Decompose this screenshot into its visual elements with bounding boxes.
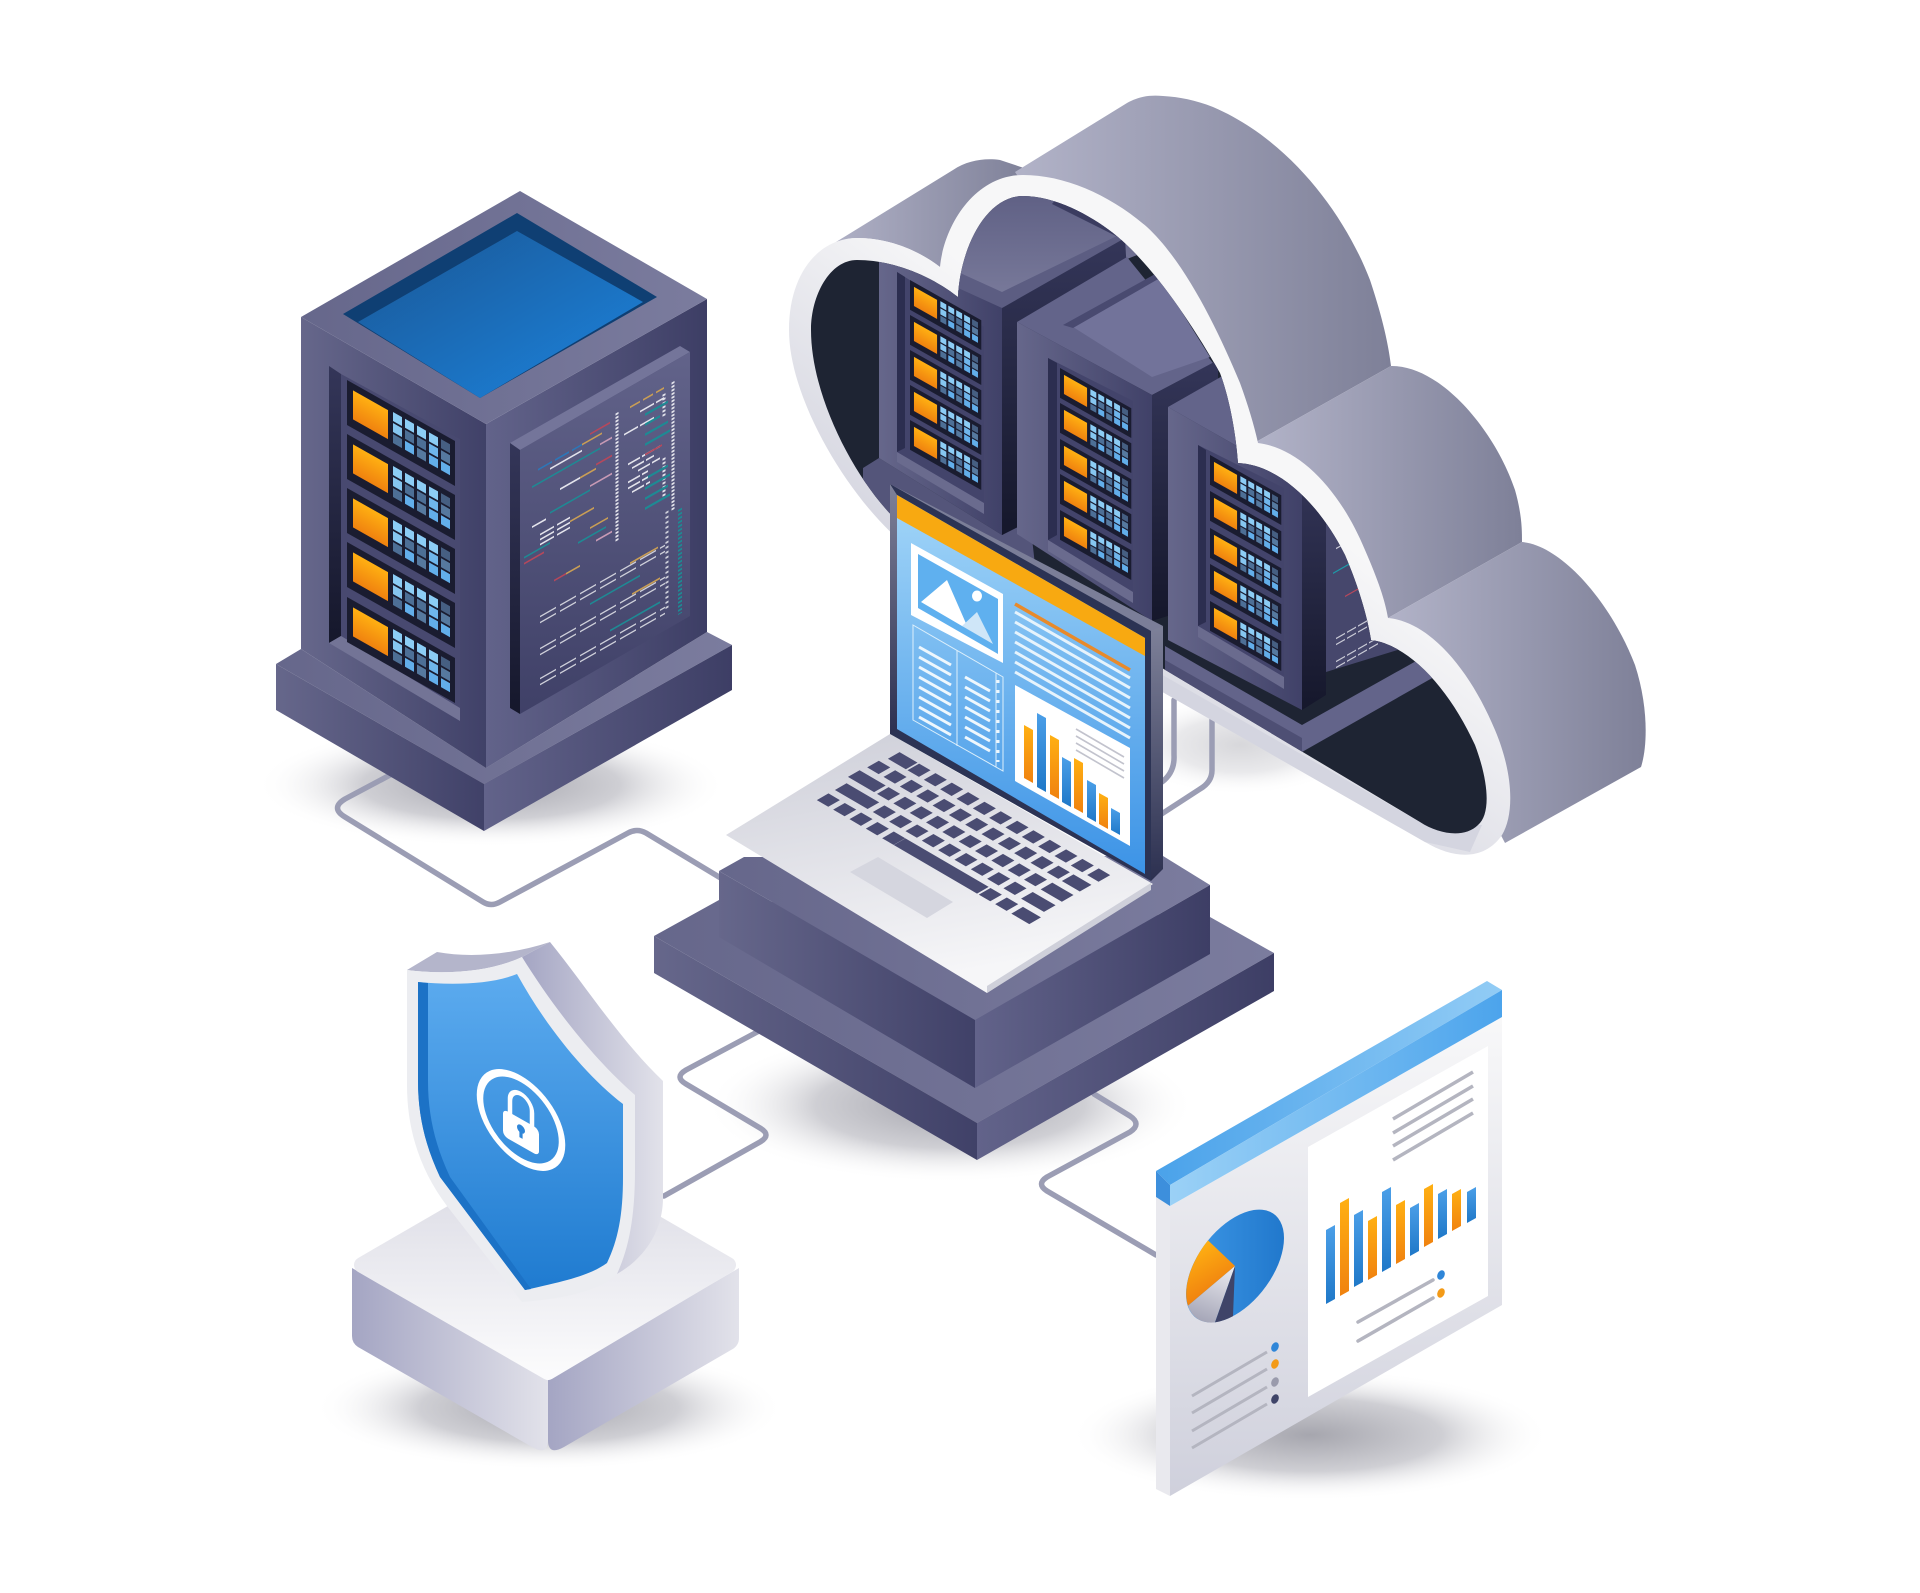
cloud interior with servers xyxy=(811,196,1487,834)
cloud xyxy=(780,96,1646,855)
dashboard left edge xyxy=(1156,1197,1170,1496)
header xyxy=(1156,981,1502,1206)
orange title bar xyxy=(897,495,1145,656)
cloud extrusion: right lobe xyxy=(1388,542,1646,843)
server tower xyxy=(276,191,732,831)
lock icon xyxy=(480,1056,562,1184)
picture xyxy=(911,543,1003,663)
server A xyxy=(863,196,1137,559)
ground shadows xyxy=(256,695,1550,1501)
grey text lines xyxy=(1393,1072,1473,1160)
server code panel xyxy=(510,346,690,714)
laptop pedestal xyxy=(654,856,1274,1160)
trackpad xyxy=(850,857,953,918)
laptop xyxy=(726,484,1163,993)
server B rack units xyxy=(1060,368,1131,580)
analytics dashboard xyxy=(1156,981,1502,1496)
server left face xyxy=(301,317,486,768)
server top blue screen xyxy=(343,213,657,398)
code lines xyxy=(524,377,680,703)
server C xyxy=(1165,366,1434,760)
server right face xyxy=(486,299,707,768)
shield blue face xyxy=(418,974,623,1290)
laptop deck edge xyxy=(987,883,1151,993)
bar chart card xyxy=(1015,685,1130,846)
pie legend xyxy=(1192,1341,1280,1448)
server B xyxy=(1017,257,1218,621)
shield xyxy=(407,942,663,1302)
chart legend xyxy=(1358,1269,1446,1341)
laptop screen frame xyxy=(890,484,1163,881)
keyboard xyxy=(812,750,1113,924)
table xyxy=(913,625,1003,771)
laptop screen xyxy=(897,495,1145,874)
shield side xyxy=(522,942,663,1274)
shield rim xyxy=(407,957,635,1302)
server A rack units xyxy=(910,280,981,490)
shield top xyxy=(407,942,550,972)
pie chart xyxy=(1186,1189,1284,1343)
cloud interior background xyxy=(811,196,1487,834)
server rack recess xyxy=(329,366,460,721)
server top xyxy=(301,191,707,424)
cloud extrusion: left lobe xyxy=(823,159,1030,267)
cloud extrusion: middle lobe xyxy=(1256,366,1522,618)
cloud front rim xyxy=(789,175,1510,855)
shield pedestal xyxy=(352,1159,739,1450)
shield darker edge xyxy=(418,982,531,1290)
server C rack units xyxy=(1210,455,1281,671)
server C code lines xyxy=(1333,546,1378,668)
lower tier xyxy=(654,900,1274,1160)
server base xyxy=(276,632,732,831)
laptop deck xyxy=(726,734,1153,993)
bar chart xyxy=(1326,1184,1476,1304)
connection cables xyxy=(338,700,1212,1255)
text lines xyxy=(1015,604,1130,738)
white chart panel xyxy=(1308,1046,1488,1397)
cloud extrusion: big lobe xyxy=(1015,96,1391,442)
cloud rim lower edge xyxy=(905,528,1482,852)
upper tier xyxy=(719,856,1210,1088)
server rack units xyxy=(347,380,455,703)
dashboard face xyxy=(1170,1017,1502,1496)
